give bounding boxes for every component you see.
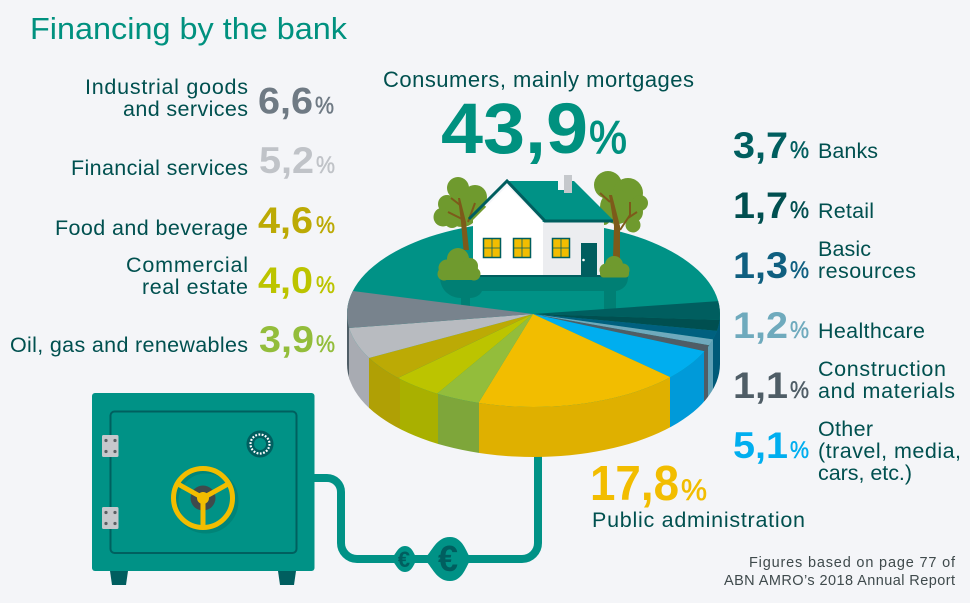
icon: large euro coin (424, 537, 471, 581)
item: banks: Banks (818, 139, 878, 163)
safe body (92, 393, 314, 571)
item: other: (travel, media, (818, 439, 961, 463)
icon: wheel (174, 468, 236, 531)
house illustration (434, 171, 648, 280)
item: banks (733, 125, 878, 166)
money pipe (312, 452, 538, 581)
item: financial services: Financial services (71, 156, 248, 180)
item: oil, gas and renewables: Oil, gas and renewables (10, 333, 248, 357)
item: oil, gas and renewables (10, 319, 335, 360)
headline: consumers (383, 67, 694, 169)
item: commercial real estate (126, 253, 335, 301)
item: healthcare (733, 305, 925, 346)
item: healthcare: Healthcare (818, 319, 925, 343)
item: basic resources: resources (818, 259, 916, 283)
house roof (469, 181, 613, 221)
safe door (110, 412, 296, 553)
icon: right bush (600, 256, 630, 278)
item: industrial goods (85, 75, 334, 122)
item: construction and materials: 1,1 (733, 365, 788, 406)
item: banks: % (790, 137, 809, 164)
item: industrial goods: Industrial goods (85, 75, 248, 99)
item: industrial goods: 6,6 (258, 80, 313, 122)
headline: consumers: Consumers, mainly mortgages (383, 67, 694, 92)
headline: public administration: Public administration (592, 508, 805, 532)
source note: ABN AMRO’s 2018 Annual Report (724, 573, 955, 589)
headline: public administration: % (681, 474, 707, 507)
item: commercial real estate: % (316, 272, 335, 299)
item: healthcare: 1,2 (733, 305, 788, 346)
safe feet (110, 571, 296, 585)
headline: consumers: % (589, 111, 627, 163)
item: retail: 1,7 (733, 185, 788, 226)
icon: top hinge (102, 435, 118, 457)
item: healthcare: % (790, 317, 809, 344)
icon: dial (246, 430, 274, 458)
safe illustration (92, 393, 314, 585)
item: other: cars, etc.) (818, 461, 912, 485)
icon: chimney (558, 175, 572, 193)
item: construction and materials: and materials (818, 379, 955, 403)
item: industrial goods: % (315, 92, 334, 120)
icon: large euro coin: € (438, 538, 458, 579)
left labels (10, 75, 335, 360)
icon: left tree (434, 177, 488, 250)
item: other: Other (818, 417, 873, 441)
house walls (473, 186, 604, 277)
item: other: 5,1 (733, 425, 788, 466)
item: oil, gas and renewables: 3,9 (259, 319, 314, 360)
icon: bottom hinge (102, 507, 118, 529)
headline: consumers: 43,9 (441, 90, 588, 169)
pie top surface (347, 221, 720, 407)
item: food and beverage (55, 200, 335, 241)
icon: windows (483, 238, 570, 258)
item: banks: 3,7 (733, 125, 788, 166)
item: food and beverage: Food and beverage (55, 216, 248, 240)
headline: public administration: 17,8 (590, 457, 679, 511)
headline: public administration (590, 457, 805, 532)
right labels (733, 125, 961, 485)
item: food and beverage: 4,6 (258, 200, 313, 241)
item: oil, gas and renewables: % (316, 331, 335, 358)
item: basic resources: % (790, 257, 809, 284)
item: commercial real estate: real estate (142, 275, 248, 299)
item: commercial real estate: 4,0 (258, 260, 313, 301)
pie chart (347, 221, 720, 457)
icon: small euro coin (391, 546, 417, 572)
item: financial services: % (316, 152, 335, 179)
icon: left bush (438, 248, 480, 280)
item: basic resources: 1,3 (733, 245, 788, 286)
house shadow (440, 277, 628, 309)
icon: small euro coin: € (398, 547, 410, 572)
icon: door (581, 243, 597, 276)
item: retail: Retail (818, 199, 874, 223)
source note (724, 555, 956, 589)
item: other: % (790, 437, 809, 464)
item: industrial goods: and services (123, 97, 248, 121)
item: commercial real estate: Commercial (126, 253, 248, 277)
item: other (733, 417, 961, 485)
item: basic resources (733, 237, 916, 286)
item: financial services: 5,2 (259, 140, 314, 181)
item: construction and materials (733, 357, 955, 406)
item: construction and materials: Construction (818, 357, 946, 381)
pie side (347, 316, 720, 457)
title: Financing by the bank (30, 12, 348, 46)
item: food and beverage: % (316, 212, 335, 239)
source note: Figures based on page 77 of (749, 555, 956, 571)
item: retail (733, 185, 874, 226)
item: construction and materials: % (790, 377, 809, 404)
item: basic resources: Basic (818, 237, 871, 261)
item: financial services (71, 140, 335, 181)
icon: right tree (594, 171, 648, 258)
item: retail: % (790, 197, 809, 224)
